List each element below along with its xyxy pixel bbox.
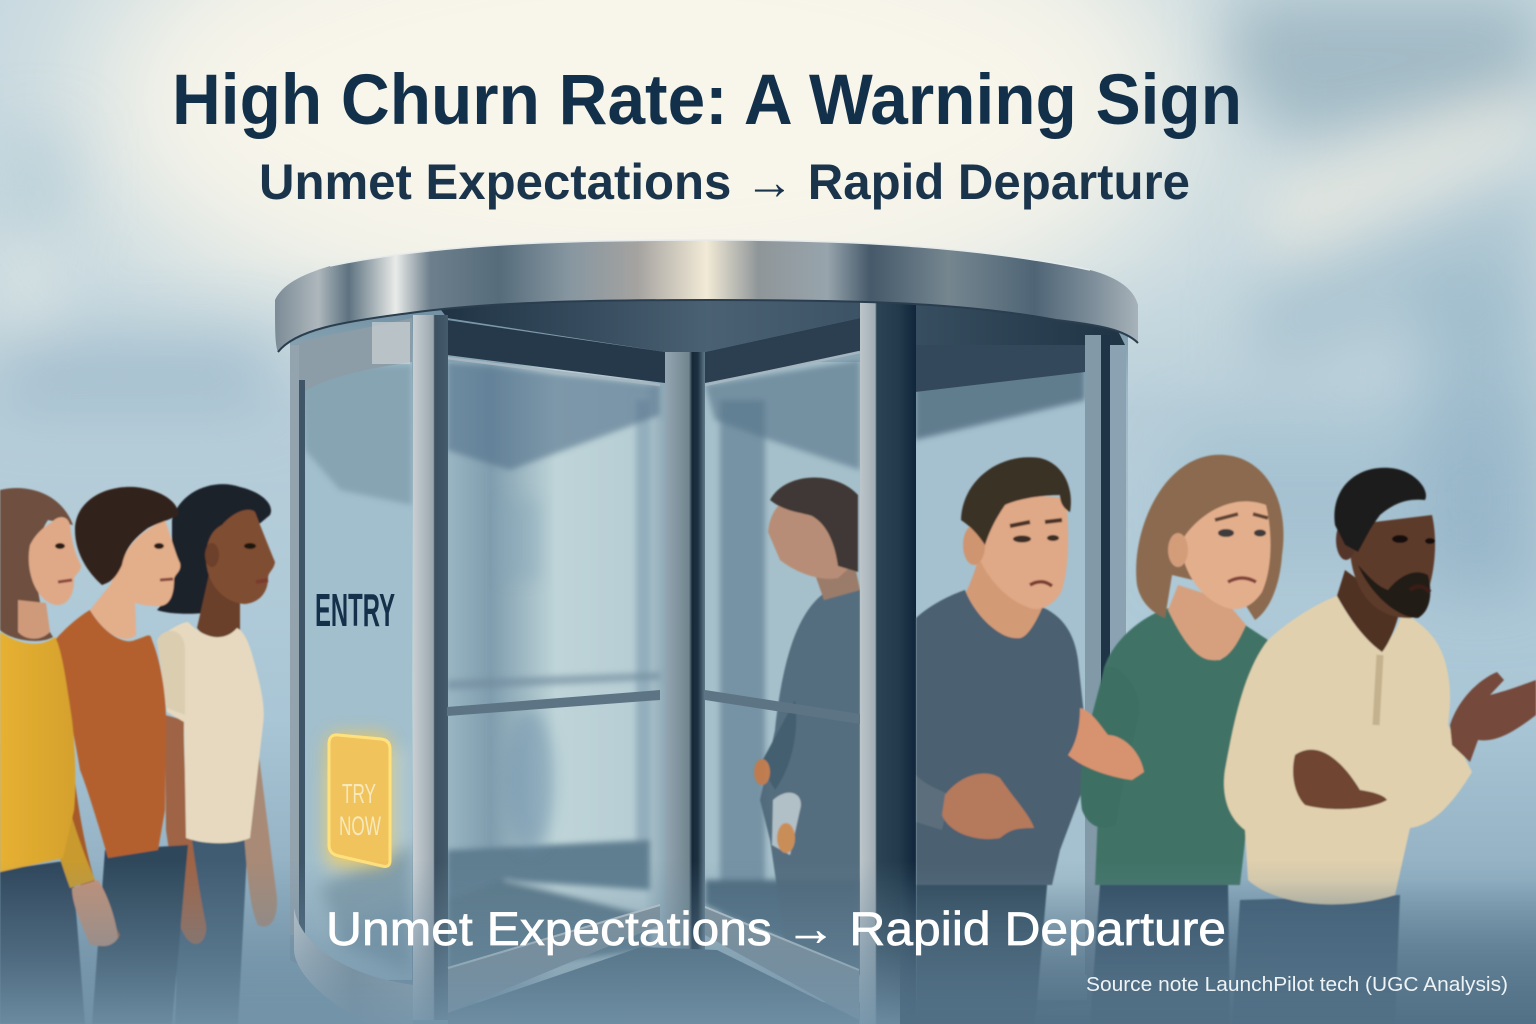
canopy [275,240,1138,352]
entering customers [0,484,277,1024]
customer: woman in yellow sweater [0,488,118,1024]
departing customers [916,455,1536,1024]
floor haze [0,860,1536,1024]
title: High Churn Rate: A Warning Sign [172,61,1242,140]
ceiling [430,295,1125,352]
curved metal base [294,908,413,1024]
source note: Source note LaunchPilot tech (UGC Analysis) [1086,974,1508,996]
subtitle: Unmet Expectations → Rapid Departure [259,154,1190,210]
try now glowing sign [328,735,390,866]
customer: man in gray sweater [916,457,1090,1024]
person inside the door [754,478,860,975]
customer: woman in green sweater [1068,455,1283,1024]
right floor shadow [900,880,1536,1024]
left post [413,315,448,1020]
customer: dark-haired woman in cream shirt [157,484,277,1024]
entry sign: ENTRY [315,584,395,636]
try now glowing sign: NOW [339,811,381,841]
floor and leaf bases [448,905,859,1024]
right post [860,300,916,1024]
door handrails [447,690,860,724]
door interior glass [290,300,1128,1020]
customer: man in beige henley [1224,468,1536,1024]
right outer frame [1085,335,1126,985]
left outer frame [290,318,412,950]
lower caption: Unmet Expectations → Rapiid Departure [326,902,1226,955]
try now glowing sign: TRY [342,778,376,809]
ceiling beams [447,318,1085,392]
customer: man in orange sweater [55,487,188,1024]
center post [665,352,705,952]
revolving door [275,240,1138,1024]
